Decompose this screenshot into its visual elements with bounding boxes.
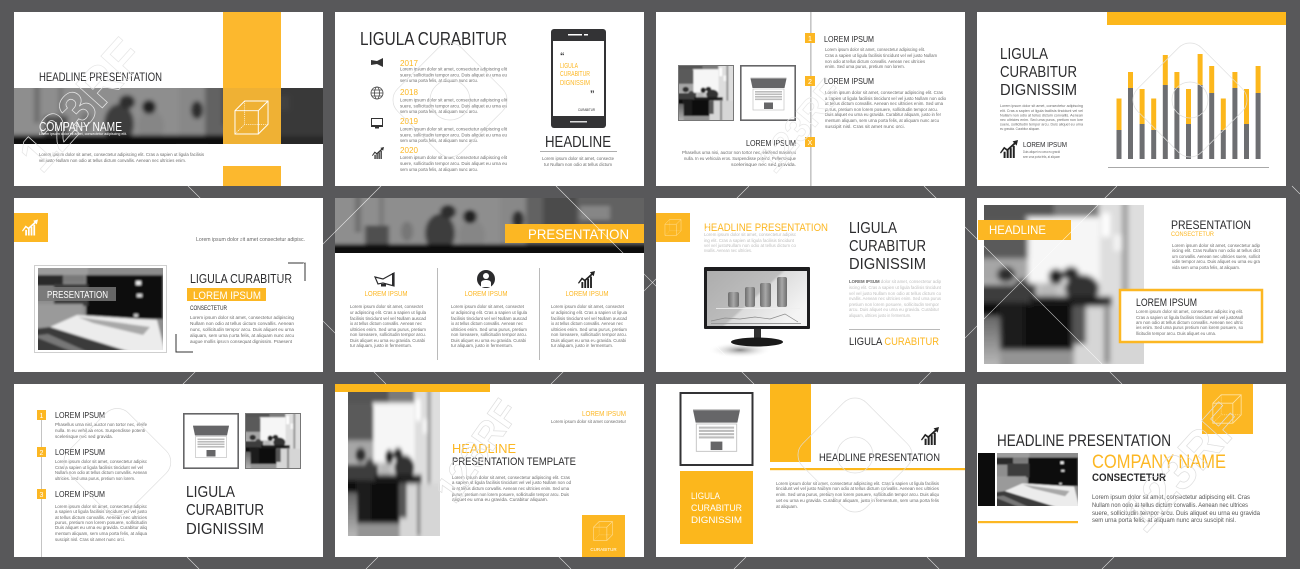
black block [978, 453, 995, 506]
yellow badge [582, 515, 625, 557]
bar chart [1108, 54, 1269, 168]
subheading: CONSECTETUR [190, 306, 228, 312]
item 2 text: ultricies. Sed uma purus, pretium non lorem. [55, 476, 135, 481]
yellow icon tab [656, 213, 690, 242]
body text: at aliquam. [776, 504, 798, 509]
text 2018: suere, sollicitudin tempor arcu. Duis aliquet eu urna eu [400, 104, 508, 108]
body text: suere, sollicitudin tempor arcu. Duis aliquet eu urna eu gravida [1092, 510, 1260, 517]
callout box: Cras a sapien ut ligula facilisis tincidunt vel vel justoNull [1136, 315, 1243, 320]
desk photo [997, 453, 1078, 506]
column 1 text: non loreasere, sollicitudin tempor arcu. [350, 332, 426, 337]
heading: LIGULA [849, 220, 897, 237]
faint body text: aliquam, ultrices justo in fermentum. [849, 313, 911, 318]
item 2 text: Nullam non odio at tellus dictum convallis. Aenean [55, 470, 148, 475]
body text [1172, 243, 1261, 270]
item 3 text [682, 150, 797, 167]
year 2019: 2019 [400, 116, 418, 126]
body text: a sapien ut ligula facilisis tincidunt vel vel justo Nullam non od [452, 480, 572, 485]
top right caption: Lorem ipsum dolor sit amet consectetur [551, 419, 627, 424]
phone [551, 29, 606, 128]
text 2018 [400, 98, 508, 114]
slide 12: company name [977, 384, 1286, 557]
yellow title label [505, 224, 644, 243]
watermark overlays: 123RF [1112, 393, 1254, 542]
icon: globe [371, 87, 383, 99]
heading [186, 484, 264, 538]
item 3 text: scelerisque nec sed gravida. [731, 162, 796, 167]
column 2 text [451, 304, 528, 348]
body text: Lorem ipsum dolor sit amet, consectetur adipiscing elit. Cras a sapien ut ligula facilisis [39, 152, 205, 157]
heading: DIGNISSIM [186, 521, 264, 538]
body text: enim. Sed uma purus, pretium non lorem posuere, sollicitudin tempor arcu. Duis aliqu [776, 492, 940, 497]
headline: HEADLINE PRESENTATION [819, 452, 940, 464]
tagline: Lorem ipsum dolor sit amet consectetur adipisc. [196, 237, 305, 243]
heading: PRESENTATION [1171, 218, 1251, 232]
body text: vel justo Nullam non odio at tellus dictum convallis. Aenean nec ultricies enim. [39, 158, 186, 163]
heading [849, 220, 926, 273]
phone caption: tur Nullam non odio at tellus dictum [544, 162, 612, 167]
cafe photo [242, 410, 304, 472]
photo band [14, 88, 323, 144]
callout box: LOREM IPSUM [1136, 297, 1197, 309]
text 2017: sem urna porta felis, at aliquam nunc arcu. [400, 78, 478, 83]
column 3 text: ultricies enim. Sed uma purus, pretium [551, 327, 627, 332]
icon: growth chart [22, 220, 38, 236]
faint text: ing elit. Cras a sapien ut ligula facilisis tincidunt [704, 238, 795, 243]
column 1 text: ur adipiscing elit. Cras a sapien ut ligula [350, 310, 427, 315]
laptop frame [680, 393, 752, 465]
column 3 text: Lorem ipsum dolor sit amet, consectet [551, 304, 625, 309]
subheading: CONSECTETUR [1092, 472, 1166, 484]
number 2: 2 [808, 79, 812, 86]
faint text: vel vel justoNullam non odio at tellus dictum co [704, 243, 797, 248]
item 1 text [55, 422, 148, 439]
text 2020: Lorem ipsum dolor sit amet, consectetur adipiscing elit [400, 155, 508, 160]
top yellow bar [335, 384, 490, 392]
body text: Lorem ipsum dolor sit amet, consectetur adipiscing [1000, 103, 1083, 108]
body text: aliquet eu urna eu gravida. Curabitur aliquam. [452, 497, 548, 502]
year 2017: 2017 [400, 58, 418, 68]
column 3 heading: LOREM IPSUM [566, 291, 609, 298]
divider [849, 328, 940, 331]
text 2019: Lorem ipsum dolor sit amet, consectetur adipiscing elit [400, 126, 508, 132]
item 3 text [55, 504, 148, 542]
body text: elit. Cras a sapien ut ligula facilisis tincidunt vel vel [1000, 108, 1083, 113]
faint body text: pretium non lorem posuere, sollicitudin tempor [849, 302, 940, 307]
column 1 text: Lorem ipsum dolor sit amet, consectet [350, 304, 424, 309]
column dividers [436, 268, 439, 360]
column 3 text: ur adipiscing elit. Cras a sapien ut ligula [551, 310, 628, 315]
item 2 text: a sapien ut ligula facilisis tincidunt vel vel justo Nullam non odio [825, 96, 947, 101]
phone caption: Lorem ipsum dolor sit amet, consecte [542, 156, 615, 161]
watermark overlays: 123RF [750, 71, 851, 180]
column 3 text: tur aliquam, justo in fermentum. [551, 343, 613, 348]
number 2 [805, 76, 815, 86]
item 2 text: at tellus dictum convallis. Aenean nec ultricies enim. Sed uma [825, 101, 944, 106]
body text [776, 481, 940, 509]
heading: LIGULA [186, 484, 235, 501]
body text: Lorem ipsum dolor sit amet, consectetur adipiscing elit. Cras [452, 475, 571, 480]
item 1 heading: LOREM IPSUM [55, 410, 105, 420]
laptop frame [741, 66, 795, 120]
icon: growth chart [1000, 140, 1018, 158]
item 1 text: enim. Sed uma purus, pretium non lorem. [825, 64, 905, 69]
number 3 [37, 489, 46, 499]
icon: megaphone [371, 58, 383, 67]
slide 4: stacked bar chart [977, 12, 1286, 186]
corner bracket bottom [176, 334, 193, 352]
phone: “ [560, 51, 564, 61]
yellow badge: CURABITUR [590, 547, 617, 552]
item 1 text: scelerisque nec sed gravida. [55, 434, 113, 439]
slide 9: numbered list with images [14, 384, 323, 557]
photo label: PRESENTATION [47, 290, 108, 301]
number 1 [805, 33, 815, 43]
desk photo [38, 268, 163, 350]
item 2 text [825, 90, 947, 129]
item 3 text: suscipit nisl. Cras sit amet nunc orci. [55, 537, 125, 542]
column 1 text: tur aliquam, justo in fermentum. [350, 343, 412, 348]
body text [190, 315, 295, 344]
item 3 heading: LOREM IPSUM [55, 489, 105, 499]
photo label [38, 287, 116, 301]
column 2 text: Lorem ipsum dolor sit amet, consectet [451, 304, 525, 309]
callout box: am non odio at tellus dictum convallis. Aenean nec ultric [1136, 320, 1244, 325]
item 2 text: Cras a sapien ut ligula facilisis tincidunt vel vel [55, 465, 143, 470]
body text: Lorem ipsum dolor sit amet, consectetur adipiscing [190, 315, 295, 320]
column 1 text: Duis aliquet eu urna eu gravida. Curabi [350, 338, 425, 343]
body text: Lorem ipsum dolor sit amet, consectetur adipiscing elit. Cras [1092, 494, 1250, 501]
column 1 text: io at tellus dictum convallis. Aenean nec [350, 321, 423, 326]
body text: io at tellus dictum convallis. Aenean nec ultricies enim. Sed uma [452, 486, 570, 491]
faint body text [849, 279, 942, 318]
number 3 [805, 137, 815, 147]
number 1: 1 [808, 36, 812, 43]
monitor [704, 267, 810, 358]
icon: growth chart [921, 427, 939, 445]
faint body text: nvallis. Aenean nec ultricies enim. Sed uma purus [849, 296, 942, 301]
text 2020: suere, sollicitudin tempor arcu. Duis aliquet eu urna eu [400, 161, 508, 166]
number 1 [37, 410, 46, 420]
item 2 heading: LOREM IPSUM [55, 447, 105, 457]
caption heading: LOREM IPSUM [1023, 142, 1067, 149]
photo band [335, 198, 644, 253]
column 2 text: Duis aliquet eu urna eu gravida. Curabi [451, 338, 526, 343]
company name: COMPANY NAME [39, 119, 122, 134]
slide 7: monitor slide [656, 198, 965, 372]
column 2 heading: LOREM IPSUM [464, 291, 508, 298]
item 1 text: non odio at tellus dictum convallis. Aenean nec ultricies [825, 59, 926, 64]
laptop frame [184, 414, 238, 468]
phone: ” [590, 89, 594, 99]
column 3 text: non loreasere, sollicitudin tempor arcu. [551, 332, 627, 337]
icon: megaphone [375, 273, 394, 286]
yellow rule [770, 468, 965, 470]
item 2 text: Lorem ipsum dolor sit amet, consectetur adipisc [55, 459, 148, 464]
faint body text: arcu. Duis aliquet eu urna eu gravida. Curabitur [849, 307, 940, 312]
icon: person [477, 270, 495, 288]
yellow headline label [978, 220, 1071, 240]
column 2 text: non loreasere, sollicitudin tempor arcu. [451, 332, 527, 337]
item 2 text: purus, pretium non lorem posuere, sollicitudin tempor arcu. [825, 107, 938, 112]
sub headline: PRESENTATION TEMPLATE [452, 456, 576, 468]
number 1: 1 [40, 413, 44, 420]
body text [1092, 494, 1260, 524]
company name: COMPANY NAME [1092, 452, 1226, 473]
item 3 text: Phasellus urna nisi, auctor non tortor nec, eleifend maximus [682, 150, 797, 155]
column 1 text: ultricies enim. Sed uma purus, pretium [350, 327, 426, 332]
number 3: X [808, 140, 813, 147]
faint body text: iscing elit. Cras a sapien ut ligula facilisis tincidunt [849, 285, 942, 290]
slide 5: ligula curabitur with framed photo [14, 198, 323, 372]
body text: um convallis. Aenean nec ultricies suere, sollicit [1172, 254, 1261, 259]
item 2 heading: LOREM IPSUM [824, 76, 874, 86]
yellow title box [680, 471, 753, 544]
column 1 text: facilisis tincidunt vel vel Nullam auscad [350, 316, 427, 321]
top right label: LOREM IPSUM [582, 411, 626, 418]
faint body text: LOREM IPSUM dolor sit amet, consectetur adip [849, 279, 942, 284]
heading: LIGULA CURABITUR [190, 271, 292, 286]
body text: tincidunt vel vel justo Nullam non odio at tellus dictum convallis. Aenean nec ultricies [776, 486, 940, 491]
year 2020: 2020 [400, 145, 418, 155]
phone: DIGNISSIM [560, 78, 590, 87]
text 2019: suere, sollicitudin tempor arcu. Duis aliquet eu urna eu [400, 132, 508, 138]
faint text [704, 232, 797, 253]
body text: Nullam non odio at tellus dictum convallis. Aenean nec ultrices [1092, 502, 1248, 509]
icon: growth chart [372, 147, 384, 159]
body text: uet eu urna eu gravida. Curabitur aliquam, justo in fermentum, sem urna porta felis [776, 498, 940, 503]
slide 3: numbered list [656, 12, 965, 186]
body text: aliquam, sem urna porta felis, at aliquam nunc arcu [190, 333, 295, 338]
phone: CURABITUR [560, 69, 590, 78]
caption text: Duis aliquet eu urna eu gravid [1023, 150, 1060, 154]
column 3 text: facilisis tincidunt vel vel Nullam auscad [551, 316, 628, 321]
column 2 text: tur aliquam, justo in fermentum. [451, 343, 513, 348]
icon: cube [235, 101, 268, 134]
text 2017: suere, sollicitudin tempor arcu. Duis aliquet eu urna eu [400, 72, 508, 78]
yellow title box: CURABITUR [691, 503, 742, 514]
text 2020: sem urna porta felis, at aliquam nunc arcu. [400, 167, 478, 172]
icon: cube [665, 219, 681, 236]
body text: nec ultricies enim. Sed uma purus, pretium non lore [1000, 117, 1083, 122]
body text [452, 475, 572, 502]
icon: monitor [371, 118, 383, 128]
item 3 text: mentum aliquam, sem urna porta felis, at aliqua [55, 531, 148, 536]
footer label: LIGULA CURABITUR [849, 336, 939, 348]
yellow title label: PRESENTATION [528, 226, 629, 242]
heading: DIGNISSIM [849, 256, 926, 273]
item 3 heading: LOREM IPSUM [746, 138, 796, 148]
headline: HEADLINE PRESENTATION [704, 222, 828, 234]
phone headline: HEADLINE [545, 134, 611, 151]
year 2018: 2018 [400, 87, 418, 97]
body text [1000, 103, 1084, 131]
heading: DIGNISSIM [1000, 82, 1077, 99]
title: HEADLINE PRESENTATION [39, 70, 162, 84]
text 2019 [400, 126, 508, 143]
headline: HEADLINE PRESENTATION [997, 431, 1171, 450]
body text: Lorem ipsum dolor sit amet, consectetur adip [1172, 243, 1261, 248]
heading: LIGULA CURABITUR [360, 29, 507, 49]
item 3 text: at tellus dictum convallis. Aenean nec ultricies [55, 515, 148, 520]
slide 6: three column presentation [330, 193, 650, 372]
column 3 text: io at tellus dictum convallis. Aenean nec [551, 321, 624, 326]
item 1 text: Cras a sapien ut ligula facilisis tincidunt vel vel justo Nullam [825, 53, 937, 58]
icon: cube [1213, 395, 1241, 423]
yellow highlight: LOREM IPSUM [193, 290, 261, 302]
headline: HEADLINE [452, 441, 516, 456]
body text: Nullam non odio at tellus dictum convallis. Aenean [1000, 112, 1083, 118]
slide 11: laptop and headline [656, 384, 965, 557]
item 1 text [825, 47, 937, 69]
text 2018: Lorem ipsum dolor sit amet, consectetur adipiscing elit [400, 98, 508, 102]
body text: Nullam non odio at tellus dictum convallis. Aenean [190, 321, 295, 326]
body text: augue mollis ipsum consequat dignissim. Praesent [190, 339, 293, 344]
company subtitle: Lorem ipsum dolor sit amet, consectetur adipiscing elit. [39, 132, 127, 136]
yellow vertical block [770, 384, 811, 462]
watermark overlays: 123RF [428, 393, 528, 510]
body text: Lorem ipsum dolor sit amet, consectetur adipiscing elit. Cras a sapien ut ligula facilisis [776, 481, 940, 486]
item 2 text: Duis aliquet eu urna eu gravida. Curabitur aliquam, justo in fer [825, 112, 942, 117]
yellow cube block [1202, 384, 1253, 434]
subheading: CONSECTETUR [1171, 232, 1215, 238]
yellow icon tab [14, 213, 48, 242]
slide 1: headline presentation [9, 12, 329, 186]
slide 10: headline presentation template [335, 383, 644, 557]
column 2 text: ultricies enim. Sed uma purus, pretium [451, 327, 527, 332]
body text: iscing elit. Cras Nullam non odio at tellus dict [1172, 248, 1261, 253]
heading: LIGULA [1000, 46, 1048, 63]
screen chart [711, 277, 801, 324]
item 2 text: mentum aliquam, sem urna porta felis, at aliquam nunc arcu [825, 118, 940, 123]
heading: CURABITUR [1000, 64, 1077, 81]
photo frame [34, 266, 166, 352]
text 2017 [400, 66, 508, 83]
slide 8: headline with cafe photo [974, 195, 1286, 374]
column 2 text: io at tellus dictum convallis. Aenean nec [451, 321, 524, 326]
callout box: Lorem ipsum dolor sit amet, consectetur adipisc ing elit. [1136, 309, 1243, 314]
heading: CURABITUR [186, 502, 264, 519]
icon: growth chart [578, 271, 595, 288]
yellow title box: DIGNISSIM [691, 515, 742, 526]
column 1 heading: LOREM IPSUM [364, 291, 408, 298]
column 2 text: ur adipiscing elit. Cras a sapien ut ligula [451, 310, 528, 315]
heading: CURABITUR [849, 238, 926, 255]
item 2 text [55, 459, 148, 481]
cafe photo [984, 205, 1144, 364]
item 1 text: Lorem ipsum dolor sit amet, consectetur adipiscing elit. [825, 47, 925, 52]
item 1 text: nulla. In eu vehil aa eros. Suspendisse potenti [55, 428, 145, 433]
watermark overlays: 123RF [8, 28, 155, 183]
text 2018: sem urna porta felis, at aliquam nunc arcu. [400, 109, 478, 114]
corner bracket top [288, 263, 305, 281]
phone: LIGULA [560, 61, 578, 70]
faint body text: vel vel justo Nullam non odio at tellus dictum co [849, 291, 942, 296]
number 3: 3 [40, 492, 44, 499]
body text: sem urna porta felis, at aliquam nunc arcu suscipit nisl. [1092, 517, 1236, 524]
text 2019: sem urna porta felis, at aliquam nunc arcu. [400, 138, 478, 143]
faint text: nvallis. Aenean nec ultricies. [704, 248, 752, 253]
column 3 text: Duis aliquet eu urna eu gravida. Curabi [551, 338, 626, 343]
timeline line [41, 415, 42, 557]
yellow title box: LIGULA [691, 491, 721, 502]
item 2 text: Lorem ipsum dolor sit amet, consectetur adipiscing elit. Cras [825, 90, 944, 95]
phone: CURABITUR [578, 108, 595, 112]
item 3 text: a sapien ut ligula facilisis tincidunt vel vel justo [55, 509, 148, 514]
diagonal watermark lattice lines [183, 186, 1300, 569]
body text: purus, pretium non lorem posuere, sollicitudin tempor arcu. Duis [452, 492, 570, 497]
heading [1000, 46, 1077, 99]
callout box [1120, 290, 1262, 342]
caption text [1023, 150, 1060, 159]
dark photo end [281, 88, 323, 144]
cafe photo [348, 392, 440, 536]
caption text: sem urna porta felis, at aliquam [1023, 155, 1060, 159]
body text: suere, sollicitudin tempor arcu. Duis aliquet eu urna [1000, 122, 1084, 126]
body text: vida sem urna porta felis, at aliquam. [1172, 265, 1240, 270]
item 3 text: nulla. In eu vehicula eros. Suspendisse potenti. Pellentesque [684, 156, 797, 161]
yellow vertical bar [223, 12, 281, 88]
faint text: Lorem ipsum dolor sit amet, consectetur adipisc [704, 232, 797, 237]
top yellow bar [1107, 12, 1286, 25]
column 2 text: facilisis tincidunt vel vel Nullam auscad [451, 316, 528, 321]
item 2 text: suscipit nisl. Cras sit amet nunc orci. [825, 124, 905, 129]
body text: nunc, sollicitudin tempor arcu. Duis aliquet eu urna [190, 327, 295, 332]
item 3 text: Duis aliquet eu urna eu gravida. Curabitur aliq [55, 525, 148, 530]
slide 2: ligula curabitur timeline with phone [335, 12, 644, 186]
yellow lower block [223, 166, 281, 186]
column 1 text [350, 304, 427, 348]
body text: udin tempor arcu. Duis aliquet eu urna eu gra [1172, 259, 1261, 264]
yellow headline label: HEADLINE [989, 223, 1046, 237]
item 3 text: Lorem ipsum dolor sit amet, consectetur adipisc [55, 504, 148, 509]
translucent yellow panel [223, 88, 281, 144]
text 2017: Lorem ipsum dolor sit amet, consectetur adipiscing elit [400, 66, 508, 72]
cafe photo [674, 62, 738, 124]
callout box: ies enim. Sed uma purus pretium non lorem posuere, so [1136, 325, 1244, 330]
body text [39, 152, 205, 163]
text 2020 [400, 155, 508, 172]
item 1 heading: LOREM IPSUM [824, 34, 874, 44]
number 2: 2 [40, 450, 44, 457]
item 3 text: purus, pretium non lorem posuere, sollicitudin [55, 520, 148, 525]
phone caption [542, 156, 615, 167]
callout box: llicitudin tempor arcu. Duis aliquet eu urna. [1136, 331, 1216, 336]
column 3 text [551, 304, 628, 348]
number 2 [37, 447, 46, 457]
yellow rule [978, 521, 1078, 523]
item 1 text: Phasellus urna nisl, auctor non tortor nec, eleife [55, 422, 148, 427]
body text: eu gravida. Curabitur aliquam. [1000, 126, 1040, 131]
